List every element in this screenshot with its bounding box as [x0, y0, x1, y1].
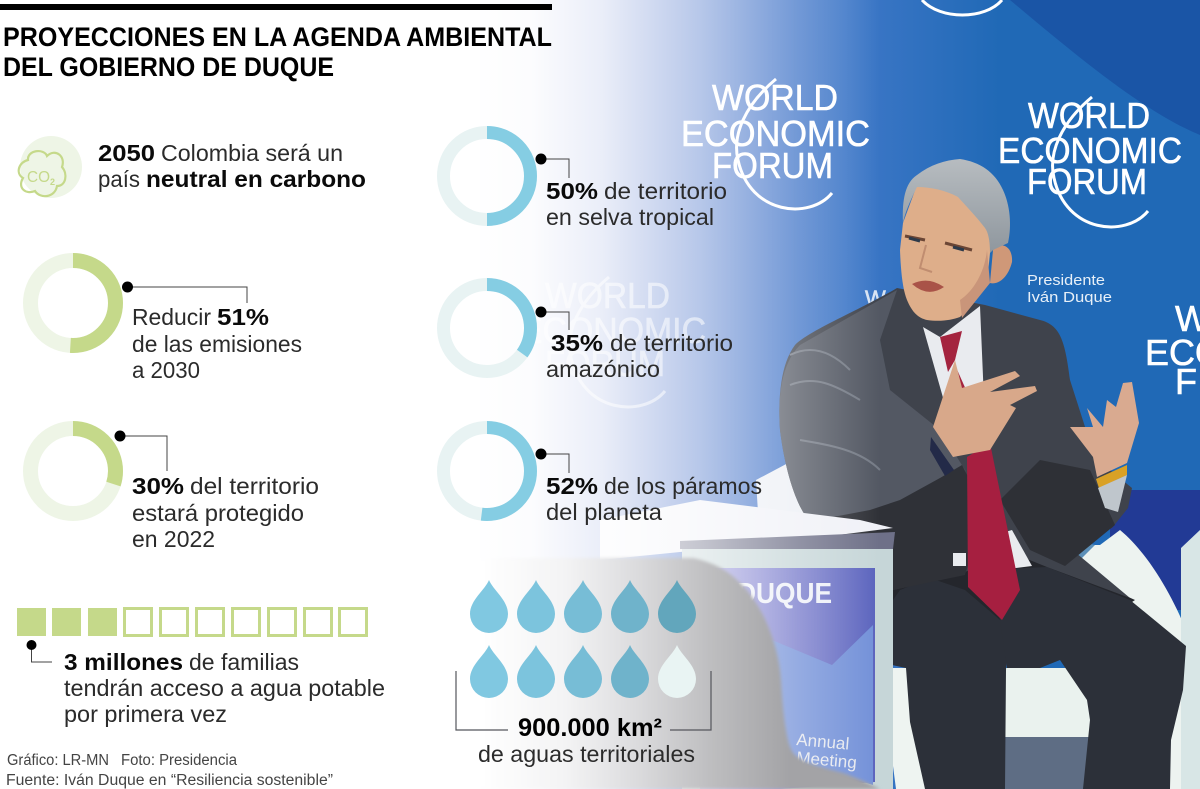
WEF logo: left backdrop: ECONOMIC: [681, 113, 870, 154]
grey vignette behind drops: [440, 558, 880, 789]
text: 51%: a 2030: [132, 357, 200, 383]
item: protect 30% territory: [30, 428, 319, 552]
WEF logo: right backdrop: FORUM: [1027, 161, 1147, 202]
title: PROYECCIONES EN LA AGENDA AMBIENTAL: [3, 22, 552, 52]
hand right: [1070, 382, 1139, 477]
text: 35%: 35%: [551, 330, 603, 356]
icon: CO2 cloud: 2: [50, 177, 55, 187]
text: 51%: [132, 304, 302, 383]
text: 51%: Reducir: [132, 304, 211, 330]
callout leader: [114, 430, 167, 471]
white fade over photo: [470, 0, 880, 789]
table: papers and name panel: Meeting: [796, 748, 858, 772]
top rule: [0, 4, 552, 10]
callout leader: [122, 282, 247, 303]
text: 3 millones: 3 millones: [64, 649, 183, 675]
WEF logo: cropped right edge: F: [1175, 361, 1197, 402]
WEF logo: behind the shoulder: W: [865, 286, 886, 311]
text: 2050: país: [98, 166, 140, 192]
table: papers and name panel: Annual: [796, 730, 850, 754]
text: 3 millones: por primera vez: [64, 701, 227, 727]
shirt: [923, 306, 1032, 570]
item: 900.000 km2 territorial waters: [456, 580, 711, 767]
photo: President Iván Duque at the World Economic Forum: [480, 0, 1200, 789]
item: carbon neutral 2050: [19, 136, 366, 198]
text: 3 millones: de familias: [189, 649, 299, 675]
callout leader: [536, 306, 569, 330]
text: 30%: estará protegido: [132, 500, 304, 526]
donut chart: 52%: [444, 428, 530, 514]
white left area: [0, 0, 470, 789]
table: papers and name panel: [600, 500, 895, 789]
text: 3 millones: tendrán acceso a agua potable: [64, 675, 385, 701]
item: 52% paramos: [444, 428, 762, 525]
donut chart: 51%: [30, 260, 116, 346]
text: 50%: en selva tropical: [546, 204, 714, 230]
suit jacket: [779, 288, 1132, 598]
title: [3, 22, 552, 82]
table: papers and name panel: DUQUE: [737, 578, 832, 610]
WEF logo: faded centre: WORLD: [545, 275, 670, 316]
text: 52%: del planeta: [546, 499, 662, 525]
item: 3 million families: [17, 608, 385, 727]
WEF logo: left backdrop: FORUM: [712, 145, 833, 186]
wristband and cuff: [930, 437, 1127, 512]
legs: [892, 567, 1186, 789]
donut chart: 30%: [30, 428, 116, 514]
torso base under jacket: [893, 555, 1135, 660]
text: 30%: 30%: [132, 473, 184, 499]
sleeve and lower-body shading: [779, 290, 1115, 590]
WEF logo: left backdrop: WORLD: [712, 77, 838, 118]
item: reduce 51% emissions: [30, 260, 302, 383]
icon: CO2 cloud: CO: [27, 169, 50, 186]
WEF logo: right backdrop: ECONOMIC: [998, 130, 1182, 171]
text: 2050: 2050: [98, 140, 155, 166]
item: 50% tropical forest: [444, 132, 727, 230]
text: 900.000 km2: 900.000 km²: [518, 714, 662, 742]
callout leader: [536, 154, 569, 178]
title: DEL GOBIERNO DE DUQUE: [3, 52, 334, 82]
credits and source: Fuente: Iván Duque en “Resiliencia sostenible”: [6, 772, 333, 789]
text: 2050: Colombia será un: [161, 140, 343, 166]
text: aguas territoriales: de aguas territoriales: [478, 741, 695, 767]
text: 50%: 50%: [546, 178, 598, 204]
text: 35%: [546, 330, 733, 382]
WEF logo: top fragment: [922, 0, 1002, 15]
WEF logo: right backdrop: [998, 95, 1182, 227]
WEF logo: left backdrop: [681, 77, 870, 209]
photo caption: Iván Duque: [1027, 289, 1112, 306]
text: 3 millones: [64, 649, 385, 727]
WEF logo: cropped right edge: [1145, 298, 1200, 402]
donut chart: 50%: [444, 132, 530, 220]
text: 30%: en 2022: [132, 526, 215, 552]
donut chart: 35%: [444, 284, 530, 372]
WEF logo: right backdrop: WORLD: [1028, 95, 1150, 136]
text: 2050: neutral en carbono: [146, 166, 366, 192]
text: 2050: [98, 140, 366, 192]
text: 52%: 52%: [546, 473, 598, 499]
WEF logo: faded centre: ECONOMIC: [520, 310, 706, 351]
item: 35% amazon: [444, 284, 733, 382]
text: 50%: de territorio: [604, 178, 727, 204]
pictogram: ten water drops: [470, 580, 696, 698]
text: 51%: de las emisiones: [132, 331, 302, 357]
text: 52%: [546, 473, 762, 525]
text: 30%: del territorio: [190, 473, 319, 499]
WEF logo: faded centre: FORUM: [545, 343, 665, 384]
photo caption: [1027, 272, 1112, 306]
text: 50%: [546, 178, 727, 230]
icon: CO2 cloud: [19, 136, 82, 198]
text: 30%: [132, 473, 319, 552]
tie: [940, 331, 1020, 620]
photo caption: Presidente: [1027, 272, 1105, 289]
hand left: [933, 360, 1037, 457]
credits and source: Foto: Presidencia: [121, 752, 237, 769]
WEF logo: faded centre: [520, 275, 706, 407]
bracket: [456, 671, 711, 730]
credits and source: [6, 752, 333, 789]
chair: white seat and backrest: [756, 462, 1200, 789]
credits and source: Gráfico: LR-MN: [7, 752, 109, 769]
text: 35%: amazónico: [546, 356, 660, 382]
callout leader: [26, 640, 52, 662]
pictogram: ten squares: [17, 608, 366, 636]
callout leader: [536, 448, 569, 473]
head: face, ear and hair: [900, 159, 1012, 321]
text: 52%: de los páramos: [604, 473, 762, 499]
text: 35%: de territorio: [610, 330, 733, 356]
text: 51%: 51%: [217, 304, 269, 330]
